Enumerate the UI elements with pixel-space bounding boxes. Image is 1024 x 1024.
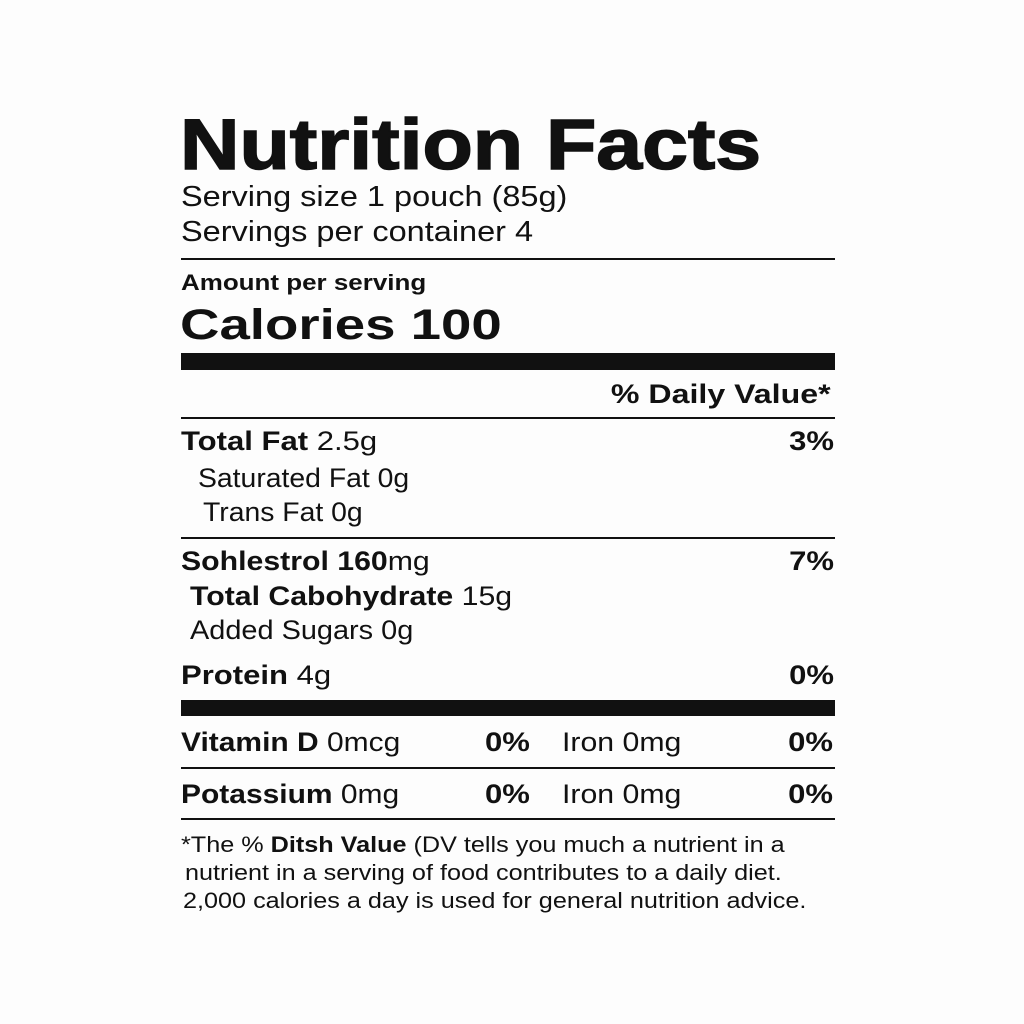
row: added sugars: Added Sugars 0g <box>190 615 413 645</box>
serving size: Serving size 1 pouch (85g) <box>181 181 567 213</box>
row: potassium / iron: Iron 0mg <box>562 779 681 809</box>
label panel <box>181 110 835 920</box>
row: sohlestrol: Sohlestrol 160mg <box>181 546 430 576</box>
footnote <box>181 832 806 913</box>
calories: Calories 100 <box>180 301 502 349</box>
text: 7% <box>789 546 834 576</box>
row: vitamin d / iron: Iron 0mg <box>562 727 681 757</box>
row: potassium / iron: 0% <box>788 779 833 809</box>
row: trans fat: Trans Fat 0g <box>203 497 363 527</box>
row: protein: Protein 4g <box>181 660 331 690</box>
title: Nutrition Facts <box>180 106 761 185</box>
row: potassium / iron <box>181 779 833 809</box>
row: potassium / iron: Potassium 0mg <box>181 779 399 809</box>
servings per container: Servings per container 4 <box>181 216 533 248</box>
row: vitamin d / iron <box>181 727 833 757</box>
row: total fat: Total Fat 2.5g <box>181 426 377 456</box>
row: vitamin d / iron: 0% <box>788 727 833 757</box>
text: 3% <box>789 426 834 456</box>
row: vitamin d / iron: 0% <box>485 727 530 757</box>
row: saturated fat: Saturated Fat 0g <box>198 463 409 493</box>
row: vitamin d / iron: Vitamin D 0mcg <box>181 727 400 757</box>
amount per serving: Amount per serving <box>181 270 426 295</box>
footnote: 2,000 calories a day is used for general nutrition advice. <box>183 888 806 913</box>
footnote: nutrient in a serving of food contributes to a daily diet. <box>185 860 782 885</box>
text: 0% <box>789 660 834 690</box>
daily value header: % Daily Value* <box>611 379 831 409</box>
footnote: *The % Ditsh Value (DV tells you much a nutrient in a <box>181 832 785 857</box>
row: carbohydrate: Total Cabohydrate 15g <box>190 581 512 611</box>
row: potassium / iron: 0% <box>485 779 530 809</box>
